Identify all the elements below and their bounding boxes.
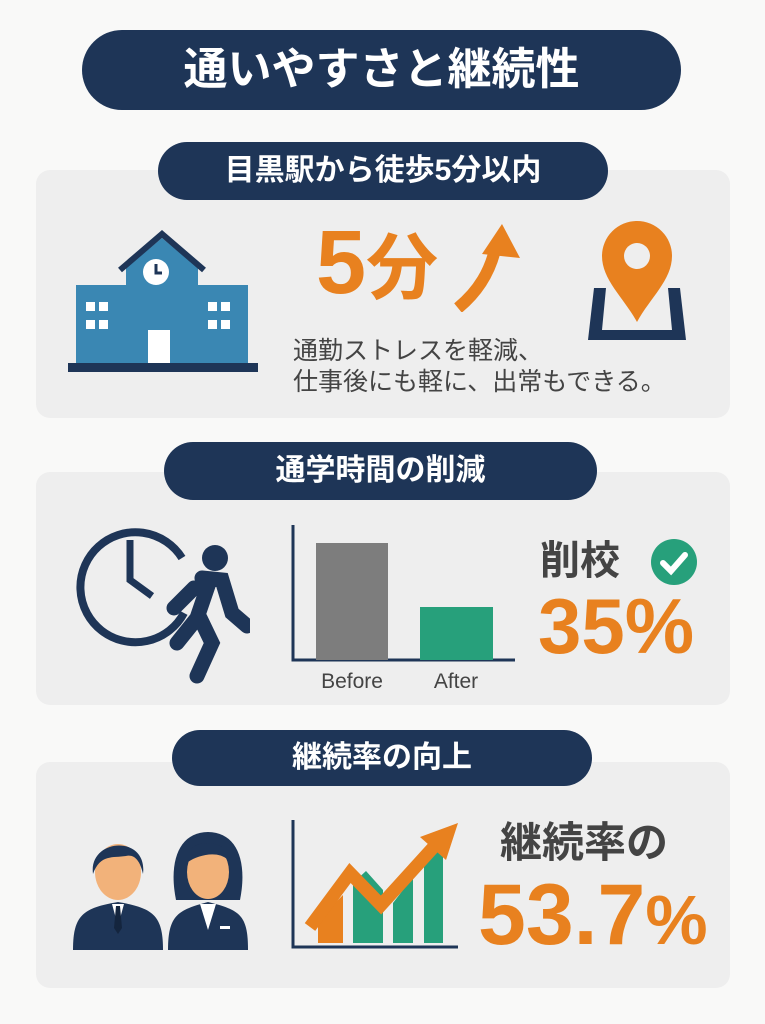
icon: school building bbox=[68, 230, 258, 372]
text: description: 仕事後にも軽に、出常もできる。 bbox=[293, 368, 666, 396]
stat: 35% reduction: 削校 bbox=[540, 539, 620, 583]
title bbox=[82, 30, 681, 110]
icon: check bbox=[651, 539, 697, 585]
stat: 5 minutes: 5分 bbox=[316, 213, 438, 313]
icon: clock and walker bbox=[76, 528, 250, 684]
text: description bbox=[293, 337, 666, 396]
icon: people bbox=[73, 832, 248, 950]
stat: retention rate: 継続率の bbox=[500, 819, 668, 866]
stat: 35% reduction: 35% bbox=[538, 582, 694, 670]
text: description: 通勤ストレスを軽減、 bbox=[293, 337, 543, 365]
panel: retention bbox=[36, 762, 730, 988]
title: 通いやすさと継続性 bbox=[184, 45, 580, 94]
bar chart: before/after: Before bbox=[321, 670, 383, 693]
stat: 35% reduction bbox=[538, 539, 697, 670]
icon: map pin bbox=[588, 221, 686, 340]
heading: retention: 継続率の向上 bbox=[292, 741, 472, 774]
icon: up arrow bbox=[454, 224, 520, 312]
heading: walking distance: 目黒駅から徒歩5分以内 bbox=[225, 154, 541, 187]
heading: retention bbox=[172, 730, 592, 786]
heading: commute time: 通学時間の削減 bbox=[276, 454, 486, 487]
chart: growth bbox=[292, 820, 458, 948]
bar chart: before/after: After bbox=[434, 670, 478, 693]
heading: commute time bbox=[164, 442, 597, 500]
heading: walking distance bbox=[158, 142, 608, 200]
bar chart: before/after bbox=[292, 525, 515, 693]
stat: retention rate bbox=[478, 819, 708, 963]
panel: commute time bbox=[36, 472, 730, 705]
stat: retention rate: 53.7% bbox=[478, 867, 708, 963]
panel: walking distance bbox=[36, 170, 730, 418]
